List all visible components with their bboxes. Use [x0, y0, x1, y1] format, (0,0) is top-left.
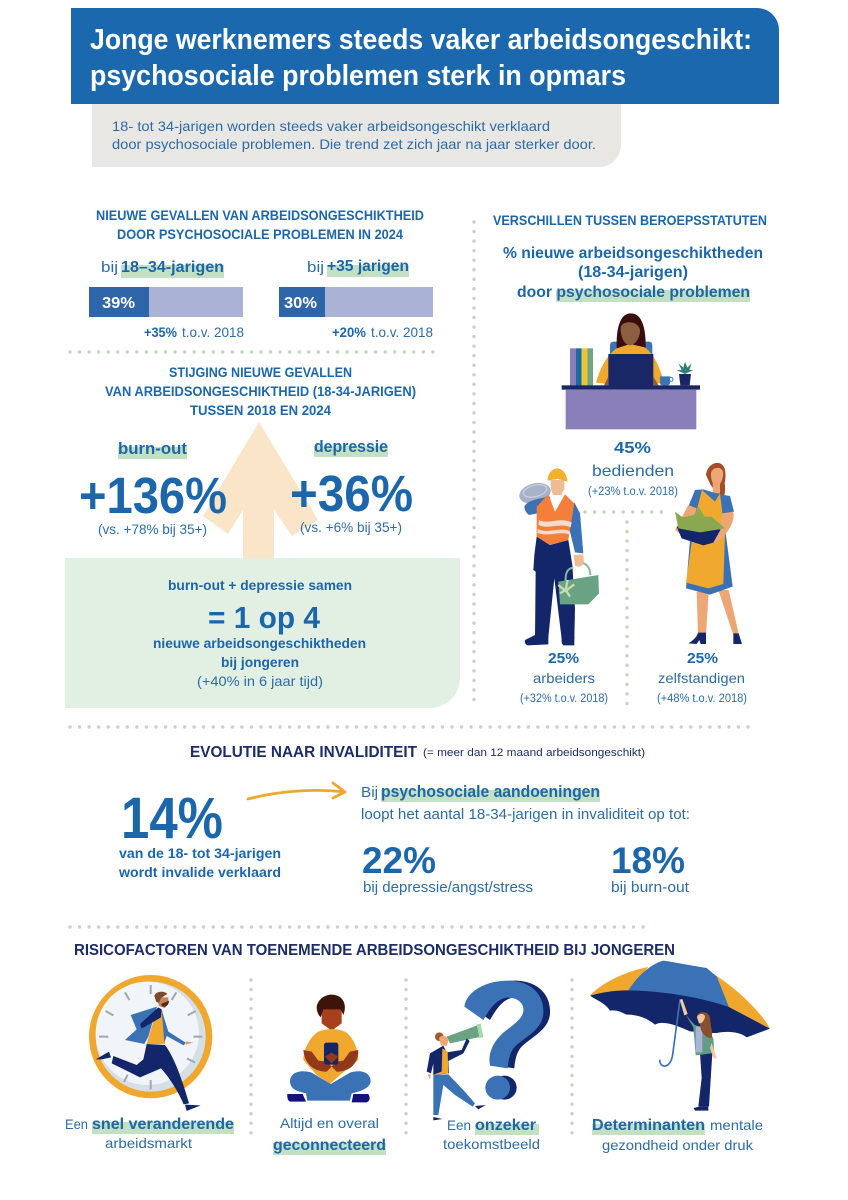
text: psychosocial conditions: psychosociale aandoeningen: [381, 782, 600, 801]
stat: blue-collar workers: (+32% t.o.v. 2018): [520, 693, 608, 705]
stat: blue-collar workers: 25%: [548, 650, 579, 667]
heading: new cases: NIEUWE GEVALLEN VAN ARBEIDSONGESCHIKTHEID: [96, 208, 424, 223]
icon: umbrella and woman: [590, 961, 770, 1111]
panel: new cases 2024: [89, 208, 433, 340]
title banner: psychosociale problemen sterk in opmars: [90, 60, 626, 92]
bar: 18-34 year olds: 18–34-jarigen: [121, 259, 224, 276]
text: changing labour market: arbeidsmarkt: [105, 1135, 192, 1151]
stat: blue-collar workers: [520, 650, 608, 705]
text: always connected: Altijd en overal: [280, 1115, 379, 1131]
icon: person with phone: [287, 995, 371, 1102]
panel: increase 2018-2024: [65, 365, 460, 708]
bar: 35 plus: +35 jarigen: [327, 258, 409, 275]
text: determinants: mentale: [710, 1117, 763, 1133]
title banner: [71, 8, 779, 104]
text: changing labour market: [65, 1116, 234, 1151]
heading: risk factors: RISICOFACTOREN VAN TOENEMENDE ARBEIDSONGESCHIKTHEID BIJ JONGEREN: [74, 942, 675, 959]
text: uncertain future: toekomstbeeld: [443, 1136, 540, 1152]
text: uncertain future: Een: [447, 1117, 471, 1133]
stat: self-employed: (+48% t.o.v. 2018): [657, 693, 747, 705]
text: psychosocial conditions: loopt het aantal 18-34-jarigen in invaliditeit op tot:: [361, 806, 690, 823]
bar: 35 plus: bij: [307, 259, 324, 276]
callout: 1 in 4: bij jongeren: [221, 654, 299, 670]
heading: increase: STIJGING NIEUWE GEVALLEN: [169, 365, 352, 380]
bar: 35 plus: +20%: [332, 324, 367, 340]
icon: self-employed woman: [675, 463, 742, 644]
heading: increase: TUSSEN 2018 EN 2024: [190, 403, 331, 418]
icon: question mark and woman with telescope: [427, 981, 550, 1120]
heading: new cases: [96, 208, 424, 242]
subheading: share of new cases: % nieuwe arbeidsongeschiktheden: [503, 245, 763, 262]
text: always connected: geconnecteerd: [273, 1137, 386, 1154]
intro text box: door psychosociale problemen. Die trend zet zich jaar na jaar sterker door.: [112, 136, 596, 152]
heading: job statuses: VERSCHILLEN TUSSEN BEROEPSSTATUTEN: [493, 213, 767, 228]
stat: 14 percent: 14%: [121, 786, 223, 851]
stat: 14 percent: wordt invalide verklaard: [118, 864, 281, 880]
icon: rising arrow: [203, 422, 318, 560]
subheading: share of new cases: (18-34-jarigen): [578, 264, 688, 281]
stat: 22 percent: [362, 840, 533, 896]
stat: depression: [290, 437, 413, 535]
subheading: share of new cases: door psychosociale problemen: [517, 284, 750, 301]
text: determinants: [592, 1117, 763, 1153]
stat: depression: (vs. +6% bij 35+): [300, 519, 402, 535]
arrow: to psychosocial: [248, 783, 345, 799]
stat: clerks: 45%: [614, 440, 651, 457]
text: changing labour market: snel veranderende: [92, 1116, 234, 1133]
callout: 1 in 4: = 1 op 4: [208, 600, 321, 635]
icon: construction worker: [517, 468, 599, 645]
stat: 18 percent: [611, 840, 689, 896]
stat: burn-out: (vs. +78% bij 35+): [98, 521, 207, 537]
bar: 18-34 year olds: 39%: [102, 295, 135, 312]
intro text box: 18- tot 34-jarigen worden steeds vaker arbeidsongeschikt verklaard: [112, 118, 550, 134]
heading: evolution: (= meer dan 12 maand arbeidsongeschikt): [423, 747, 645, 759]
bar: 18-34 year olds: t.o.v. 2018: [182, 324, 244, 340]
bar: 35 plus: 30%: [284, 295, 317, 312]
heading: increase: [105, 365, 416, 418]
text: psychosocial conditions: Bij: [361, 784, 378, 801]
bar: 35 plus: t.o.v. 2018: [371, 324, 433, 340]
text: changing labour market: Een: [65, 1116, 88, 1132]
panel: job statuses: [493, 213, 767, 706]
stat: 14 percent: van de 18- tot 34-jarigen: [119, 845, 281, 861]
text: uncertain future: [443, 1117, 540, 1152]
callout: 1 in 4: [65, 558, 460, 708]
bar: 18-34 year olds: +35%: [144, 324, 177, 340]
text: determinants: Determinanten: [592, 1117, 705, 1134]
stat: 14 percent: [118, 786, 281, 880]
stat: 18 percent: bij burn-out: [611, 880, 689, 896]
callout: 1 in 4: burn-out + depressie samen: [168, 577, 352, 593]
stat: 18 percent: 18%: [611, 840, 685, 881]
stat: self-employed: 25%: [687, 650, 718, 667]
stat: self-employed: [657, 650, 747, 705]
stat: depression: +36%: [290, 465, 413, 522]
stat: clerks: [588, 440, 678, 498]
stat: clerks: bedienden: [592, 463, 674, 480]
stat: self-employed: zelfstandigen: [658, 670, 745, 686]
bar: 35 plus: [279, 258, 433, 340]
stat: depression: depressie: [314, 437, 388, 456]
stat: burn-out: [79, 439, 227, 537]
text: always connected: [273, 1115, 386, 1155]
stat: 22 percent: bij depressie/angst/stress: [363, 880, 533, 896]
callout: 1 in 4: (+40% in 6 jaar tijd): [197, 673, 323, 689]
text: uncertain future: onzeker: [475, 1117, 536, 1134]
bar: 18-34 year olds: [89, 259, 244, 340]
subheading: share of new cases: [503, 245, 763, 302]
heading: new cases: DOOR PSYCHOSOCIALE PROBLEMEN IN 2024: [117, 227, 403, 242]
text: determinants: gezondheid onder druk: [602, 1137, 754, 1153]
title banner: Jonge werknemers steeds vaker arbeidsongeschikt:: [90, 24, 752, 56]
icon: office worker at desk: [562, 313, 700, 429]
text: psychosocial conditions: [361, 782, 690, 823]
stat: blue-collar workers: arbeiders: [533, 670, 595, 686]
stat: clerks: (+23% t.o.v. 2018): [588, 486, 678, 498]
panel: evolution to invalidity: [118, 744, 690, 896]
icon: running man and clock: [89, 975, 212, 1111]
panel: risk factors: [65, 942, 770, 1155]
heading: evolution: EVOLUTIE NAAR INVALIDITEIT: [190, 744, 417, 761]
stat: 22 percent: 22%: [362, 840, 436, 881]
stat: burn-out: +136%: [79, 467, 227, 524]
stat: burn-out: burn-out: [118, 439, 187, 458]
intro text box: [92, 104, 621, 167]
bar: 18-34 year olds: bij: [101, 259, 118, 276]
heading: increase: VAN ARBEIDSONGESCHIKTHEID (18-34-JARIGEN): [105, 384, 416, 399]
heading: evolution: [190, 744, 645, 761]
callout: 1 in 4: nieuwe arbeidsongeschiktheden: [153, 635, 366, 651]
